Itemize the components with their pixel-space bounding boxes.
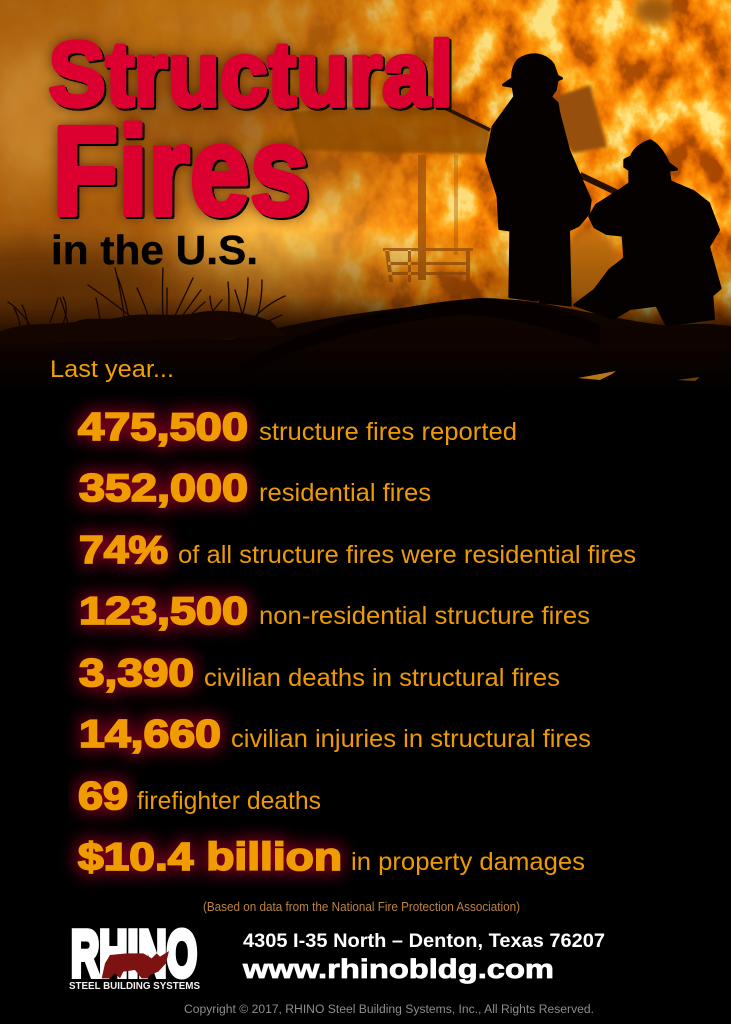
roof of burning building [290, 85, 607, 154]
title line: Structural: Structural [48, 24, 454, 126]
fire hose lines behind firefighters [445, 108, 620, 194]
stat: percent residential: of all structure fires were residential fires [178, 541, 636, 569]
title [48, 24, 454, 273]
stat: civilian deaths: civilian deaths in structural fires [204, 664, 560, 692]
stat: residential fires [79, 467, 431, 510]
dark smoke patch at top right [635, 0, 675, 24]
stat: non-residential [79, 590, 590, 633]
grass tuft [0, 268, 285, 345]
title line: in the U.S.: in the U.S. [51, 227, 258, 273]
left dark fade [0, 245, 170, 325]
stat: firefighter deaths: firefighter deaths [137, 787, 321, 815]
lower darkening [0, 230, 731, 400]
stat: property damages: $10.4 billion [78, 836, 342, 879]
icon: rhino silhouette [102, 951, 169, 978]
website: www.rhinobldg.com [242, 954, 554, 984]
ember glints [578, 371, 616, 380]
stat: residential fires: residential fires [259, 479, 431, 507]
stat: non-residential: non-residential structure fires [259, 602, 590, 630]
stat: firefighter deaths: 69 [78, 775, 128, 818]
statistics list [78, 406, 636, 879]
stat: civilian deaths: 3,390 [79, 652, 194, 695]
stat: firefighter deaths [78, 775, 321, 818]
copyright: Copyright © 2017, RHINO Steel Building Systems, Inc., All Rights Reserved. [184, 1004, 594, 1016]
photo: burning structure with firefighters [0, 0, 731, 340]
contact address: 4305 I-35 North – Denton, Texas 76207 [243, 930, 605, 952]
stat: non-residential: 123,500 [79, 590, 248, 633]
stat: percent residential: 74% [79, 529, 168, 572]
logo: RHINO Steel Building Systems [69, 917, 200, 992]
stat: percent residential [79, 529, 636, 572]
title line: Fires: Fires [52, 100, 310, 242]
firefighter: standing [486, 55, 590, 305]
intro: Last year: Last year... [50, 356, 174, 383]
source note: (Based on data from the National Fire Protection Association) [203, 900, 520, 914]
ground silhouette with hose [0, 298, 731, 400]
stat: property damages [78, 836, 585, 879]
stat: civilian injuries: 14,660 [79, 713, 221, 756]
firefighter: kneeling [575, 141, 720, 325]
stat: structure fires: 475,500 [78, 406, 248, 449]
smooth glow under the firefighters' arms [560, 228, 620, 312]
logo tagline: STEEL BUILDING SYSTEMS [69, 980, 200, 992]
building post and porch [383, 155, 473, 282]
stat: civilian injuries [79, 713, 591, 756]
stat: structure fires [78, 406, 517, 449]
stat: residential fires: 352,000 [79, 467, 248, 510]
logo wordmark: RHINO [71, 917, 197, 990]
stat: civilian injuries: civilian injuries in structural fires [231, 725, 591, 753]
stat: civilian deaths [79, 652, 560, 695]
stat: property damages: in property damages [351, 848, 585, 876]
stat: structure fires: structure fires reported [259, 418, 517, 446]
